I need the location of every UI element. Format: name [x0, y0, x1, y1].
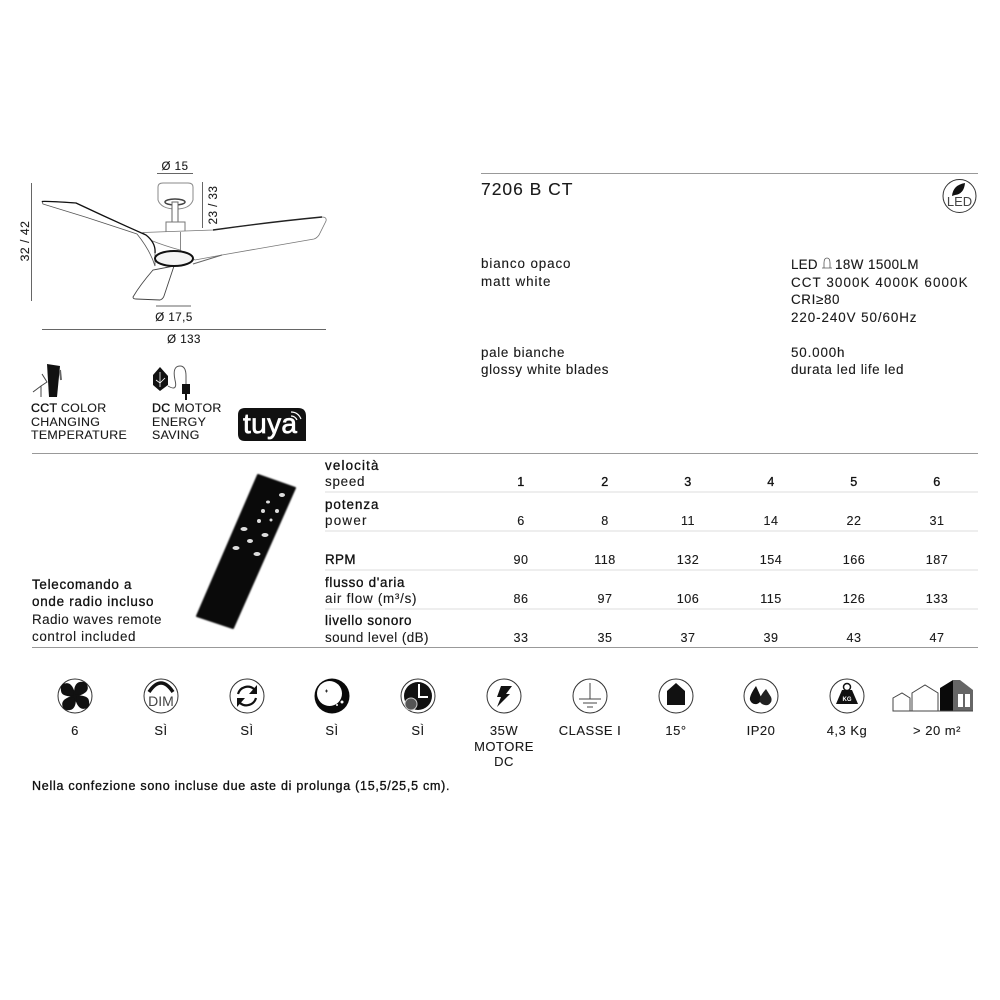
- label: night yes: SÌ: [325, 723, 339, 738]
- icon: IP rating drops: [744, 679, 778, 713]
- row: power: 8: [601, 514, 609, 528]
- row: power: 14: [763, 514, 779, 528]
- row: RPM: 154: [760, 553, 782, 567]
- remote caption: Telecomando a: [32, 577, 132, 592]
- label: motor: [474, 723, 534, 769]
- row: power: 22: [846, 514, 862, 528]
- lighting specs: CRI≥80: [791, 292, 840, 307]
- row: air flow: 97: [597, 592, 613, 606]
- row: sound level: 37: [680, 631, 696, 645]
- icon: class I earth: [573, 679, 607, 713]
- row: speed: 1: [517, 475, 525, 489]
- row: speed: 6: [933, 475, 941, 489]
- row: power: [325, 497, 945, 528]
- CCT label: CCT COLOR: [31, 401, 106, 415]
- row: sound level: [325, 613, 945, 645]
- row: sound level: 33: [513, 631, 529, 645]
- lighting specs: durata led life led: [791, 362, 904, 377]
- DC motor label: ENERGY: [152, 415, 206, 429]
- icon: CCT remote in hand: [33, 364, 61, 397]
- row: power: 11: [681, 514, 695, 528]
- label: class: CLASSE I: [559, 723, 621, 738]
- icon: dimmer: DIM: [148, 693, 174, 709]
- row: RPM: RPM: [325, 552, 356, 567]
- table rules: [32, 454, 978, 648]
- row: air flow: flusso d'aria: [325, 575, 405, 590]
- row: air flow: 126: [843, 592, 865, 606]
- label: 6: 6: [71, 723, 79, 738]
- DC motor label: DC MOTOR: [152, 401, 222, 415]
- row: air flow: [325, 575, 948, 606]
- CCT label: CHANGING: [31, 415, 100, 429]
- icon: ceiling angle: [659, 679, 693, 713]
- row: speed: 3: [684, 475, 692, 489]
- icon: tuya logo: tuya: [243, 408, 297, 439]
- label: angle: 15°: [665, 723, 687, 738]
- icon: dimmer: [144, 679, 178, 713]
- row: sound level: sound level (dB): [325, 630, 429, 645]
- icon: weight: KG: [842, 697, 852, 703]
- label: motor: MOTORE: [474, 739, 534, 754]
- lighting specs: LED: [791, 257, 818, 272]
- row: air flow: 115: [760, 592, 782, 606]
- row: speed: [325, 458, 941, 489]
- row: sound level: 39: [763, 631, 779, 645]
- finish specs: glossy white blades: [481, 362, 609, 377]
- row: RPM: 118: [594, 553, 616, 567]
- row: air flow: air flow (m³/s): [325, 591, 417, 606]
- label: reverse yes: SÌ: [240, 723, 254, 738]
- row: air flow: 133: [926, 592, 948, 606]
- fan technical drawing: 23 / 33: [208, 186, 220, 224]
- fan technical drawing: Ø 133: [167, 334, 201, 346]
- remote caption: onde radio incluso: [32, 594, 154, 609]
- lighting specs: 220-240V 50/60Hz: [791, 310, 917, 325]
- icon: remote control: [197, 475, 295, 628]
- lighting specs: CCT 3000K 4000K 6000K: [791, 275, 968, 290]
- icon: weight: [830, 679, 864, 713]
- icon: LED leaf: [943, 180, 976, 212]
- footnote: Nella confezione sono incluse due aste di prolunga (15,5/25,5 cm).: [32, 779, 450, 793]
- product header: 7206 B CT: [481, 179, 573, 199]
- row: sound level: 43: [846, 631, 862, 645]
- label: dimmer yes: SÌ: [154, 723, 168, 738]
- icon: motor power: [487, 679, 521, 713]
- CCT label: [31, 401, 127, 442]
- label: IP: IP20: [747, 723, 775, 738]
- DC motor label: [152, 401, 222, 442]
- row: speed: velocità: [325, 458, 379, 473]
- icon: reverse rotation: [230, 679, 264, 713]
- icon: LED leaf: LED: [947, 194, 972, 209]
- row: power: power: [325, 513, 367, 528]
- icon: timer: [401, 679, 435, 713]
- row: sound level: livello sonoro: [325, 613, 412, 628]
- CCT label: TEMPERATURE: [31, 428, 127, 442]
- row: RPM: 166: [843, 553, 865, 567]
- label: motor: DC: [494, 754, 514, 769]
- row: speed: 4: [767, 475, 775, 489]
- icon: night mode: [314, 678, 350, 714]
- row: speed: 5: [850, 475, 858, 489]
- finish specs: [481, 256, 609, 377]
- row: RPM: [325, 552, 948, 567]
- lighting specs: 18W 1500LM: [835, 257, 919, 272]
- row: RPM: 90: [513, 553, 529, 567]
- row: RPM: 187: [926, 553, 948, 567]
- lighting specs: 50.000h: [791, 345, 845, 360]
- fan technical drawing: 32 / 42: [18, 221, 32, 261]
- row: power: potenza: [325, 497, 379, 512]
- DC motor label: SAVING: [152, 428, 200, 442]
- fan technical drawing: Ø 17,5: [155, 312, 193, 324]
- icon: DC motor leaf and plug: [153, 366, 190, 400]
- row: power: 31: [929, 514, 945, 528]
- fan technical drawing: [18, 161, 326, 346]
- finish specs: matt white: [481, 274, 551, 289]
- row: RPM: 132: [677, 553, 699, 567]
- icon: houses room size: [893, 680, 973, 711]
- label: weight: 4,3 Kg: [827, 723, 867, 738]
- fan technical drawing: Ø 15: [162, 161, 188, 173]
- row: speed: 2: [601, 475, 609, 489]
- remote caption: [32, 577, 162, 644]
- row: sound level: 35: [597, 631, 613, 645]
- remote caption: control included: [32, 629, 136, 644]
- label: motor: 35W: [490, 723, 518, 738]
- remote caption: Radio waves remote: [32, 612, 162, 627]
- lighting specs: [791, 257, 968, 377]
- finish specs: bianco opaco: [481, 256, 571, 271]
- label: timer yes: SÌ: [411, 723, 425, 738]
- row: air flow: 106: [677, 592, 699, 606]
- icon: fan speeds: [58, 679, 92, 713]
- row: air flow: 86: [513, 592, 529, 606]
- row: sound level: 47: [929, 631, 945, 645]
- performance table: [325, 458, 948, 645]
- label: room size: > 20 m²: [913, 723, 961, 738]
- finish specs: pale bianche: [481, 345, 565, 360]
- row: speed: speed: [325, 474, 365, 489]
- row: power: 6: [517, 514, 525, 528]
